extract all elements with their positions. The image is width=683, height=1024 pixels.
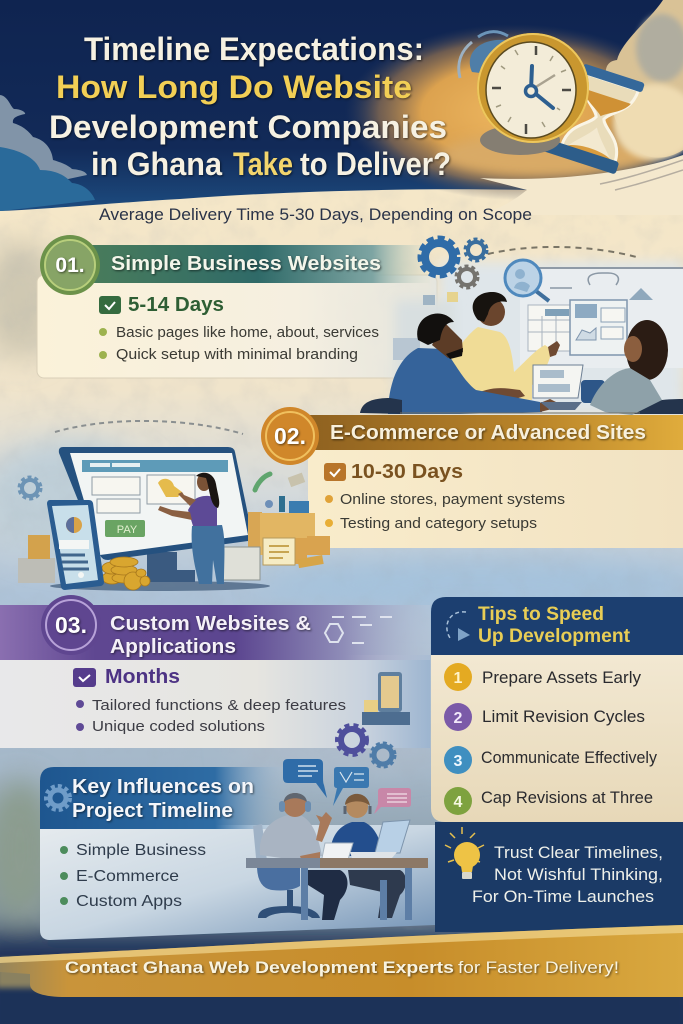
person: yellow shirt xyxy=(448,292,560,400)
gear xyxy=(19,477,41,499)
tip 3 xyxy=(444,746,657,774)
panel: custom websites xyxy=(0,595,430,748)
golden glow xyxy=(345,24,683,200)
clouds: left xyxy=(0,95,95,211)
floating notes xyxy=(393,292,458,360)
bullet list: Basic pages like home, about, services xyxy=(116,324,379,341)
header xyxy=(431,597,683,657)
title: Take xyxy=(233,146,293,182)
tip 3: 3 xyxy=(454,753,463,770)
table edge xyxy=(400,412,640,414)
duration: Months xyxy=(105,666,180,688)
tip 2: Limit Revision Cycles xyxy=(482,707,645,726)
illustration: online store xyxy=(18,421,330,591)
callout text: Not Wishful Thinking, xyxy=(494,865,663,884)
illustration: team meeting xyxy=(360,238,683,415)
heading xyxy=(478,603,630,647)
person: blue shirt xyxy=(388,314,558,414)
left boxes xyxy=(18,535,55,583)
title: Timeline Expectations: xyxy=(84,31,424,67)
tips card xyxy=(431,655,683,822)
gears xyxy=(420,238,487,288)
number badge: 02. xyxy=(274,423,306,449)
number badge xyxy=(261,407,319,465)
number badge: 01. xyxy=(55,254,85,277)
ground shadow xyxy=(50,581,270,591)
bullet list xyxy=(99,324,379,363)
call to action banner: Contact Ghana Web Development Experts xyxy=(65,958,454,977)
card body xyxy=(37,275,437,378)
tip 3: Communicate Effectively xyxy=(481,748,657,767)
laptop xyxy=(533,365,583,410)
title: How Long Do Website xyxy=(56,69,412,105)
bullet list: Custom Apps xyxy=(76,893,182,910)
bullet list: Unique coded solutions xyxy=(92,718,265,735)
tip 4: 4 xyxy=(454,794,463,811)
tip 2 xyxy=(444,703,645,731)
card body xyxy=(0,655,430,748)
phone xyxy=(47,500,104,590)
background colour washes xyxy=(0,240,683,1024)
hexagon icon xyxy=(325,617,392,643)
heading: E-Commerce or Advanced Sites xyxy=(330,421,646,444)
pay button: PAY xyxy=(117,524,138,536)
number badge xyxy=(41,595,101,655)
magnifier xyxy=(505,260,549,301)
bullet list: E-Commerce xyxy=(76,868,179,885)
icon: arc arrow xyxy=(447,612,470,641)
crate xyxy=(220,547,260,580)
heading: Key Influences on xyxy=(72,775,254,798)
coins xyxy=(102,557,150,590)
speech bubbles xyxy=(283,759,411,814)
bullet list: Tailored functions & deep features xyxy=(92,697,346,714)
tip 4 xyxy=(444,787,653,815)
clouds: right xyxy=(606,0,683,160)
title: in Ghana xyxy=(91,146,222,182)
header band xyxy=(305,415,683,450)
header band xyxy=(48,245,430,283)
person: woman at screen xyxy=(158,473,224,584)
icon: gear xyxy=(46,786,70,810)
title xyxy=(49,31,451,182)
panel: simple business websites xyxy=(37,235,437,378)
chair xyxy=(253,824,320,918)
title: to Deliver? xyxy=(300,146,451,182)
monitor xyxy=(59,447,252,560)
panel: key influences xyxy=(40,767,435,940)
card body xyxy=(40,825,435,940)
heading xyxy=(110,612,311,658)
duration: 10-30 Days xyxy=(351,461,463,483)
illustration: two colleagues at desk xyxy=(246,725,428,920)
panel: trust callout xyxy=(435,822,683,932)
callout text: For On-Time Launches xyxy=(472,887,654,906)
laptops xyxy=(321,820,410,863)
heading: Custom Websites & xyxy=(110,612,311,635)
tip 2: 2 xyxy=(454,710,463,727)
icon: phone and box xyxy=(362,672,410,725)
call to action banner xyxy=(0,925,683,997)
header band xyxy=(0,605,430,660)
dashed arc xyxy=(488,247,640,258)
icon: hourglass xyxy=(535,57,645,174)
tip 4: Cap Revisions at Three xyxy=(481,788,653,807)
heading: Simple Business Websites xyxy=(111,252,381,275)
header band xyxy=(40,767,290,829)
call to action banner: for Faster Delivery! xyxy=(458,958,619,977)
gears xyxy=(337,725,395,767)
number badge xyxy=(40,235,100,295)
tip 1: Prepare Assets Early xyxy=(482,668,641,687)
small floating icons xyxy=(255,473,309,513)
desk xyxy=(246,858,428,920)
dashed arrow xyxy=(55,421,243,434)
bullet list xyxy=(60,842,206,910)
panel: e-commerce xyxy=(261,407,683,548)
duration xyxy=(73,666,180,688)
duration: 5-14 Days xyxy=(128,294,224,316)
heading xyxy=(72,775,254,822)
heading: Applications xyxy=(110,635,236,658)
title: Development Companies xyxy=(49,109,447,145)
bullet list: Online stores, payment systems xyxy=(340,491,565,508)
heading: Project Timeline xyxy=(72,799,233,822)
monitor stand xyxy=(147,552,195,582)
bullet list: Simple Business xyxy=(76,842,206,859)
panel: tips to speed up development xyxy=(431,597,683,822)
bullet list: Quick setup with minimal branding xyxy=(116,346,358,363)
bullet list xyxy=(76,697,346,735)
pay button xyxy=(105,520,145,537)
bullet list xyxy=(325,491,565,532)
person: woman xyxy=(590,320,668,415)
number badge: 03. xyxy=(55,612,87,638)
backdrop wash xyxy=(440,262,683,414)
cream swoosh xyxy=(480,156,683,215)
subtitle: Average Delivery Time 5-30 Days, Depending on Scope xyxy=(99,206,532,224)
person: left xyxy=(260,793,348,920)
tip 1: 1 xyxy=(454,670,463,687)
card body xyxy=(308,448,683,548)
tip 1 xyxy=(444,663,641,691)
chairs xyxy=(360,380,683,414)
heading: Up Development xyxy=(478,625,630,647)
callout text xyxy=(472,843,663,906)
heading: Tips to Speed xyxy=(478,603,604,625)
bullet list: Testing and category setups xyxy=(340,515,537,532)
screen backdrop xyxy=(520,268,683,368)
header band xyxy=(0,0,683,215)
person: right xyxy=(330,794,406,918)
icon: light bulb xyxy=(445,827,484,879)
boxes xyxy=(248,512,330,568)
icon: clock xyxy=(459,32,589,155)
callout text: Trust Clear Timelines, xyxy=(494,843,663,862)
